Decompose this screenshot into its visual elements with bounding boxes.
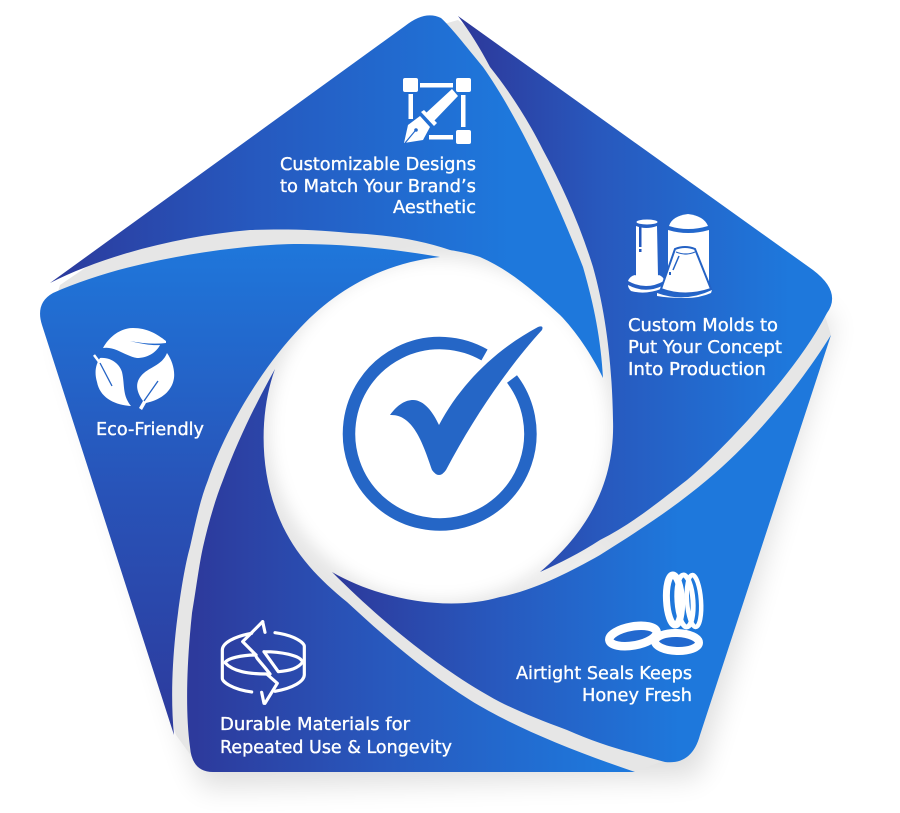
icon: seal rings [607,575,703,652]
icon: centre check mark in ring [349,326,542,524]
text: customizable designs: Aesthetic [393,198,476,218]
icon: pen and bounding box [403,78,471,144]
text: durable materials: Durable Materials for [220,715,411,735]
text: airtight seals: Honey Fresh [582,686,692,706]
text: customizable designs: to Match Your Brand’s [280,177,476,197]
white centre disc [269,259,611,601]
panel: eco-friendly [40,244,440,735]
icon: three leaves [94,328,174,410]
panel: custom molds [458,16,832,572]
text: airtight seals: Airtight Seals Keeps [516,664,692,684]
text: custom molds [628,316,782,380]
panel: customizable designs [50,15,603,378]
outer drop shadow [63,42,833,787]
panel: airtight seals [332,335,831,762]
panel: durable materials [187,369,635,772]
text: airtight seals [516,664,692,706]
text: customizable designs: Customizable Designs [280,155,476,175]
text: eco-friendly: Eco-Friendly [96,420,204,440]
text: custom molds: Into Production [628,360,766,380]
text: customizable designs [280,155,476,218]
icon: molds [628,214,712,298]
text: custom molds: Custom Molds to [628,316,778,336]
text: durable materials [220,715,452,758]
text: custom molds: Put Your Concept [628,338,782,358]
icon: disc with cycling arrows [222,622,304,703]
text: durable materials: Repeated Use & Longevity [220,738,452,758]
